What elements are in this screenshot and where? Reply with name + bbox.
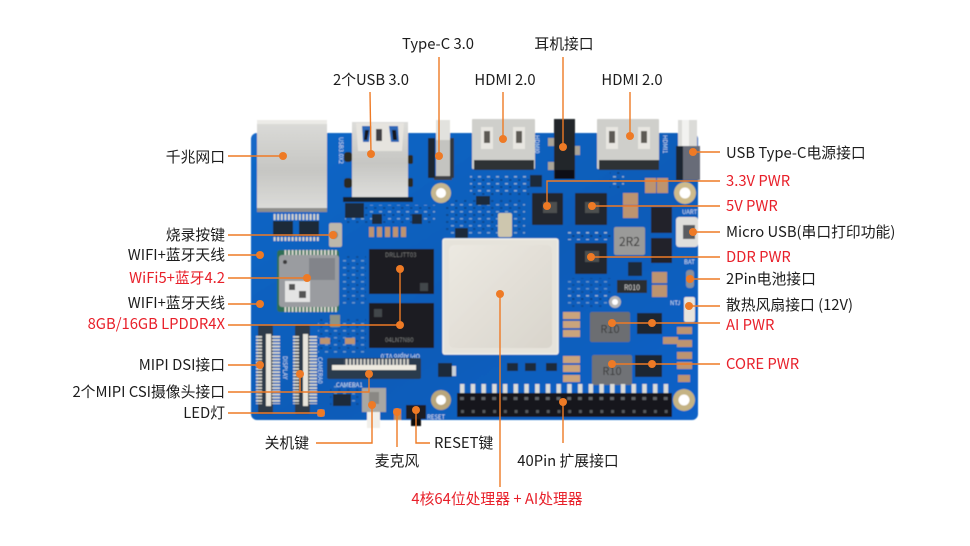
- component: power chips: R010: [624, 283, 640, 293]
- callouts: bottom: [265, 290, 619, 509]
- callout: LED: LED灯: [183, 402, 225, 423]
- silkscreen labels: USB3.0X2: [337, 137, 346, 165]
- callout: LED: [183, 402, 325, 423]
- silkscreen labels: BAT: [684, 257, 695, 266]
- component: MIPI CSI connector: [293, 325, 317, 414]
- component: 40-pin header: [457, 384, 672, 417]
- silkscreen labels: CAMERA1: [336, 380, 363, 389]
- callout: CORE PWR: CORE PWR: [726, 353, 799, 374]
- component: gigabit ethernet port: [257, 120, 327, 241]
- callout: DDR PWR: DDR PWR: [726, 246, 791, 267]
- callout: reset button: RESET键: [434, 432, 494, 453]
- silkscreen labels: CAMERA0: [316, 357, 325, 384]
- component: AI and core power inductors: R10: [600, 321, 620, 337]
- callout: processor: [411, 290, 583, 509]
- callout: MIPI CSI: [72, 370, 373, 402]
- callout: fan connector: 散热风扇接口 (12V): [726, 294, 853, 315]
- callout: Type-C 3.0: [402, 33, 474, 160]
- component: micro USB port: [676, 217, 698, 247]
- callouts: left side: [72, 146, 404, 423]
- callout: headphone jack: [534, 33, 594, 151]
- callout: battery connector: [686, 268, 816, 289]
- callout: USB 3.0: 2个USB 3.0: [333, 69, 409, 90]
- callouts: top: [333, 33, 663, 160]
- callout: AI PWR: [608, 314, 774, 335]
- component: battery connector: [686, 270, 694, 288]
- component: HDMI port 2: [597, 119, 659, 170]
- callout: burn button: 烧录按键: [166, 224, 225, 245]
- callouts: right side: [543, 142, 895, 374]
- callout: 40-pin header: 40Pin 扩展接口: [517, 450, 619, 471]
- callout: antenna 2: WIFI+蓝牙天线: [128, 292, 225, 313]
- component: AI and core power inductors: R10: [602, 363, 622, 379]
- silkscreen labels: DISPLAY: [281, 356, 290, 380]
- component: WiFi module: [277, 250, 339, 312]
- callout: HDMI 2.0 left: HDMI 2.0: [474, 69, 536, 90]
- callout: HDMI 2.0 left: [474, 69, 536, 143]
- callout: power button: [265, 401, 376, 453]
- component: processor heat spreader: [443, 239, 558, 354]
- component: LED: [318, 410, 324, 416]
- component: USB 3.0 port: [343, 122, 413, 218]
- callout: Type-C 3.0: Type-C 3.0: [402, 33, 474, 54]
- callout: reset button: [412, 406, 494, 453]
- callout: Micro USB: Micro USB(串口打印功能): [726, 221, 895, 242]
- callout: HDMI 2.0 right: HDMI 2.0: [601, 69, 663, 90]
- callout: processor: 4核64位处理器 + AI处理器: [411, 488, 583, 509]
- silkscreen labels: OPi AIpro V1.0: [380, 352, 420, 361]
- component: microphone: [394, 409, 401, 420]
- callout: LPDDR4X memory: [88, 265, 404, 334]
- silkscreen labels: RESET: [427, 412, 445, 421]
- silkscreen labels: HDMI1: [661, 135, 670, 153]
- component: MIPI DSI connector: [256, 325, 280, 414]
- component: Type-C 3.0 port: [428, 120, 454, 180]
- silkscreen labels: UART: [682, 207, 698, 216]
- callout: 3.3V PWR: [543, 170, 790, 210]
- callout: HDMI 2.0 right: [601, 69, 663, 140]
- callout: LPDDR4X memory: 8GB/16GB LPDDR4X: [88, 313, 226, 334]
- silkscreen labels: HDMI0: [533, 135, 542, 154]
- callout: microphone: [375, 408, 419, 471]
- callout: 3.3V PWR: 3.3V PWR: [726, 170, 790, 191]
- callout: USB 3.0: [333, 69, 409, 158]
- component: camera FPC connector: [327, 358, 421, 379]
- component: AI and core power inductors: [563, 312, 692, 385]
- callout: DDR PWR: [587, 246, 791, 267]
- small parts: capacitor row and logic chips: [320, 175, 642, 406]
- component: USB Type-C power port: [676, 120, 700, 180]
- callout: 40-pin header: [517, 398, 619, 471]
- callout: gigabit ethernet: 千兆网口: [166, 146, 225, 167]
- callout: CORE PWR: [608, 353, 799, 374]
- callout: burn button: [166, 224, 337, 245]
- silkscreen labels: NTJ: [670, 298, 680, 307]
- callout: WiFi module: [129, 267, 311, 288]
- callout: power button: 关机键: [265, 432, 309, 453]
- callout: AI PWR: AI PWR: [726, 314, 774, 335]
- callout: USB Type-C power: USB Type-C电源接口: [726, 142, 866, 163]
- component: HDMI port 1: [472, 119, 535, 170]
- mounting holes: [431, 182, 696, 411]
- component: LPDDR4X chips: DRLLJTT03: [385, 250, 417, 259]
- callout: gigabit ethernet: [166, 146, 287, 167]
- panel: circuit board: [251, 119, 700, 428]
- component: LPDDR4X chips: 04LN7N80: [385, 335, 414, 344]
- component: headphone jack: [548, 119, 580, 179]
- callout: 5V PWR: 5V PWR: [726, 195, 778, 216]
- component: power chips: [532, 178, 672, 297]
- component: fan connector: [684, 297, 695, 322]
- callout: MIPI DSI: MIPI DSI接口: [139, 354, 225, 375]
- component: power switch: [362, 388, 386, 428]
- component: reset button: [406, 405, 426, 426]
- callout: microphone: 麦克风: [375, 450, 419, 471]
- callout: MIPI CSI: 2个MIPI CSI摄像头接口: [72, 381, 225, 402]
- callout: MIPI DSI: [139, 354, 264, 375]
- callout: battery connector: 2Pin电池接口: [726, 268, 816, 289]
- callout: headphone jack: 耳机接口: [534, 33, 594, 54]
- callout: WiFi module: WiFi5+蓝牙4.2: [129, 267, 225, 288]
- silkscreen labels: [281, 135, 698, 421]
- component: power chips: 2R2: [619, 233, 640, 250]
- callout: antenna 1: WIFI+蓝牙天线: [128, 244, 225, 265]
- callout: 5V PWR: [588, 195, 778, 216]
- component: burn button: [329, 223, 342, 247]
- component: LPDDR4X chips: [369, 249, 434, 348]
